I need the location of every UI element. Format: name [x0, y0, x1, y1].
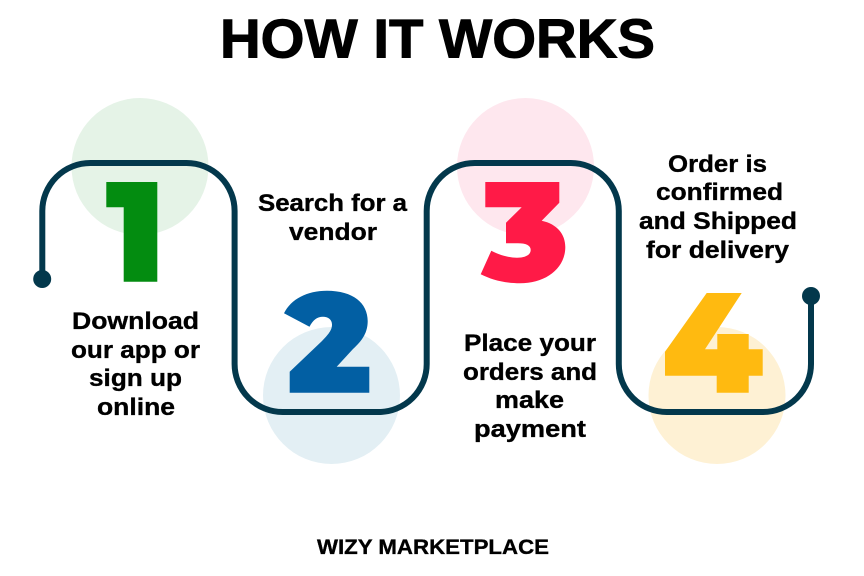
numeral 1	[106, 182, 157, 282]
text: step 2: Search for a	[258, 190, 408, 217]
circle: step 1 background	[72, 98, 208, 235]
footer brand name: WIZY MARKETPLACE	[317, 536, 549, 559]
text: step 1: online	[97, 394, 175, 421]
text: step 4: Order is	[668, 151, 767, 178]
connecting path line	[33, 163, 820, 412]
text: step 3: Place your	[464, 330, 596, 357]
text: step 1: Download	[72, 308, 199, 335]
text: step 3: make	[495, 387, 564, 414]
numeral 3	[481, 182, 565, 283]
text: step 1: our app or	[71, 337, 200, 364]
circle: step 4 background	[648, 327, 786, 464]
text: step 3	[463, 330, 597, 443]
text: step 3: orders and	[463, 359, 597, 386]
numeral 4	[665, 293, 763, 393]
text: step 1	[71, 308, 200, 421]
circle: step 3 background	[457, 98, 594, 235]
text: step 4: confirmed	[656, 179, 783, 206]
circle: step 2 background	[263, 327, 400, 464]
text: step 4: and Shipped	[639, 208, 797, 235]
text: step 2: vendor	[289, 219, 377, 246]
title: HOW IT WORKS	[220, 8, 655, 70]
text: step 4	[639, 151, 797, 264]
text: step 3: payment	[474, 416, 586, 443]
text: step 2	[258, 190, 408, 246]
text: step 1: sign up	[89, 365, 182, 392]
text: step 4: for delivery	[646, 237, 790, 264]
numeral 2	[284, 291, 369, 393]
